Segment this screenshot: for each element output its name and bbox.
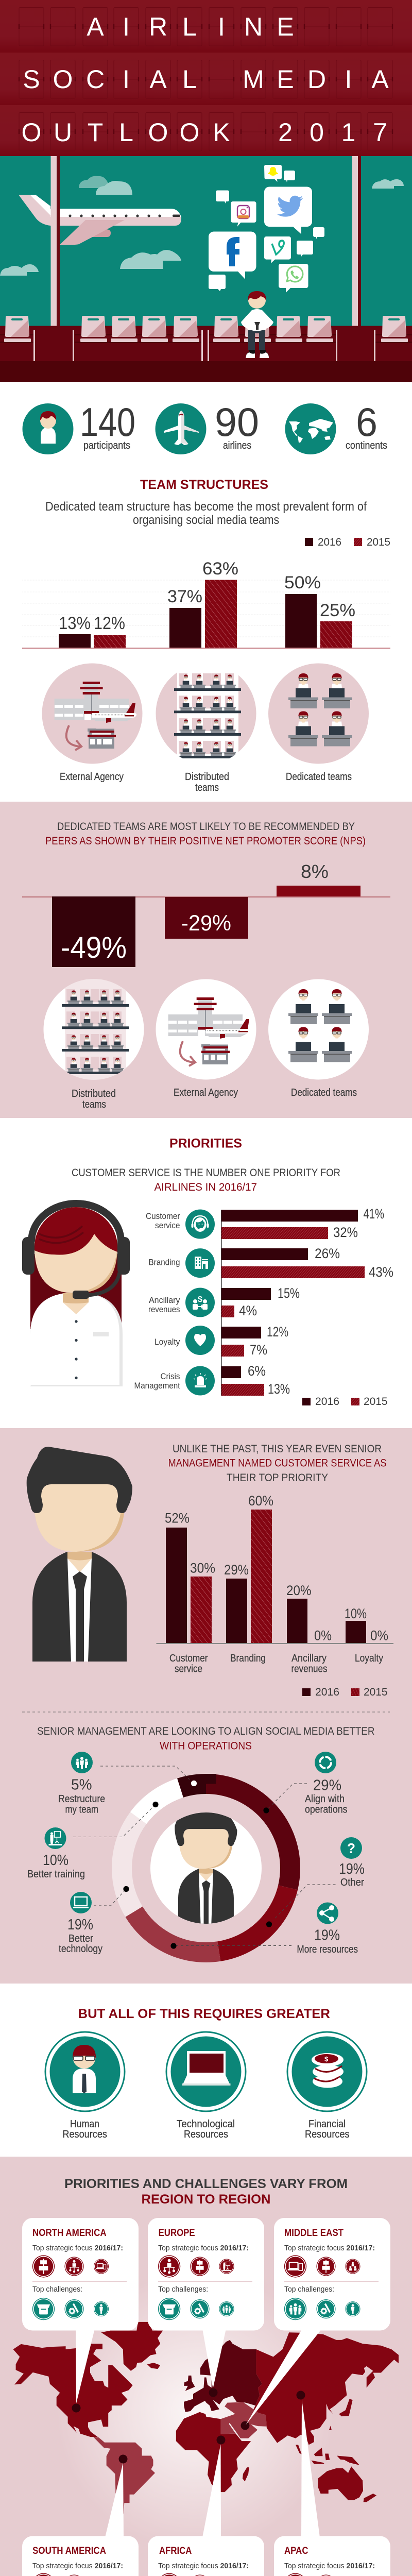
icon: dedicated teams NPS	[268, 979, 369, 1098]
airport scene	[0, 156, 412, 382]
callout: align with operations: operations	[305, 1804, 347, 1816]
callout: better training: 10%	[43, 1852, 68, 1869]
icon: plane top view	[164, 411, 199, 445]
card: South America: 2016/17:	[95, 2562, 123, 2570]
world map	[13, 2322, 399, 2514]
callout: restructure my team	[58, 1752, 105, 1816]
figure: manager in donut	[175, 1812, 237, 1924]
figure: senior manager	[27, 1447, 132, 1662]
card: Middle East	[274, 2218, 390, 2331]
icon: human resources: Human	[70, 2119, 99, 2130]
regions heading: PRIORITIES AND CHALLENGES VARY FROM	[64, 2177, 348, 2191]
branding row: Branding	[148, 1257, 180, 1267]
card: APAC: APAC	[284, 2546, 308, 2556]
bar chart: senior priorities: 30%	[190, 1560, 215, 1575]
bar chart: team structures	[22, 559, 390, 649]
senior management heading: MANAGEMENT NAMED CUSTOMER SERVICE AS	[168, 1457, 386, 1469]
ancillary revenues row: 4%	[239, 1303, 257, 1318]
icon: financial resources: $	[324, 2055, 329, 2063]
card: Africa	[148, 2536, 264, 2576]
card: Middle East: MIDDLE EAST	[284, 2228, 344, 2239]
align with operations heading	[37, 1725, 375, 1752]
icon: technological resources	[166, 2032, 246, 2140]
icon: human resources: Resources	[62, 2129, 107, 2140]
card: APAC: 2016/17:	[346, 2562, 375, 2570]
bar chart: senior priorities: 29%	[224, 1562, 249, 1578]
seats	[4, 316, 408, 342]
icon: distributed teams: teams	[195, 782, 219, 793]
bar chart: senior priorities: 20%	[286, 1583, 311, 1598]
bar chart: senior priorities: Ancillary	[291, 1653, 327, 1664]
NPS heading	[45, 821, 366, 847]
icon: distributed teams: Distributed	[185, 771, 229, 783]
callout: other: Other	[340, 1877, 364, 1888]
customer service row: 41%	[364, 1206, 384, 1222]
crisis management row: 13%	[268, 1381, 290, 1397]
icon: distributed teams NPS: teams	[82, 1099, 106, 1110]
heading: requires greater: BUT ALL OF THIS REQUIRES GREATER	[78, 2007, 330, 2021]
icon: financial resources	[287, 2032, 367, 2140]
heading: priorities: PRIORITIES	[169, 1137, 242, 1151]
card pointers	[76, 2329, 322, 2537]
icon: external agency NPS: External Agency	[174, 1087, 238, 1098]
departure board title: SOCIAL MEDIA	[23, 65, 389, 94]
team structures subtitle	[45, 500, 367, 527]
NPS bar chart: -29%	[181, 911, 231, 936]
icon: technological resources: Technological	[177, 2119, 235, 2130]
stat: participants: participants	[83, 440, 130, 451]
card: South America: Top strategic focus	[32, 2562, 93, 2570]
bar chart: priorities	[134, 1206, 393, 1397]
icon: dedicated teams	[268, 664, 369, 783]
map pins	[72, 2388, 305, 2464]
legend: senior chart: 2015	[364, 1686, 387, 1698]
callout: more resources: More resources	[297, 1944, 358, 1955]
legend: senior chart	[302, 1686, 387, 1698]
NPS bar chart: 8%	[301, 861, 329, 882]
legend: priorities: 2015	[364, 1396, 387, 1408]
stat: airlines	[156, 399, 259, 454]
ancillary revenues row: Ancillary	[149, 1295, 180, 1305]
card: Middle East: Top strategic focus	[284, 2244, 345, 2252]
legend: team chart: 2016	[318, 536, 341, 548]
departure board title: OUTLOOK 2017	[22, 118, 387, 147]
callout: other	[339, 1837, 365, 1888]
icon: technological resources: Resources	[184, 2129, 228, 2140]
clouds	[0, 176, 404, 276]
icon: dedicated teams: Dedicated teams	[286, 771, 352, 783]
crisis management row: Crisis	[161, 1371, 180, 1381]
icon: person	[40, 411, 56, 444]
regions heading: REGION TO REGION	[141, 2192, 271, 2207]
senior management heading: UNLIKE THE PAST, THIS YEAR EVEN SENIOR	[173, 1443, 382, 1455]
figure: customer service agent	[22, 1204, 130, 1386]
customer service row: 32%	[333, 1225, 358, 1240]
callout: better technology: 19%	[67, 1917, 93, 1933]
card: Middle East: Top challenges:	[284, 2285, 334, 2294]
callout: more resources	[297, 1902, 358, 1955]
senior management heading: THEIR TOP PRIORITY	[227, 1472, 328, 1484]
bar chart: senior priorities: Loyalty	[355, 1653, 383, 1664]
bar chart: senior priorities: 52%	[165, 1511, 190, 1526]
bar chart: team structures: 13%	[59, 614, 91, 633]
icon: distributed teams	[156, 663, 256, 793]
bar chart: senior priorities: 0%	[314, 1628, 332, 1643]
callout: more resources: 19%	[314, 1927, 340, 1943]
bar chart: senior priorities: Branding	[230, 1653, 266, 1664]
stat: participants: 140	[80, 399, 135, 445]
callout: restructure my team: 5%	[71, 1776, 92, 1793]
callout: better training	[27, 1827, 85, 1880]
align with operations heading: WITH OPERATIONS	[160, 1740, 252, 1752]
bar chart: senior priorities: 0%	[370, 1628, 388, 1643]
card: North America: NORTH AMERICA	[32, 2228, 107, 2239]
card: Europe	[148, 2218, 264, 2331]
donut chart	[122, 1784, 290, 1953]
crisis management row: Management	[134, 1381, 180, 1391]
panel: senior management	[0, 1428, 412, 1984]
panel: regions	[0, 2157, 412, 2576]
priorities subtitle: CUSTOMER SERVICE IS THE NUMBER ONE PRIORITY FOR	[72, 1167, 340, 1179]
card: North America: 2016/17:	[95, 2244, 123, 2252]
card: North America	[22, 2218, 139, 2331]
bar chart: senior priorities: service	[175, 1663, 202, 1674]
card: Europe: Top challenges:	[158, 2285, 208, 2294]
legend: team chart	[305, 536, 390, 548]
icon: external agency: External Agency	[60, 771, 124, 783]
team structures subtitle: organising social media teams	[133, 513, 279, 527]
card: Europe: 2016/17:	[220, 2244, 249, 2252]
bar chart: senior priorities: revenues	[291, 1663, 328, 1674]
NPS bar chart: -49%	[61, 931, 127, 964]
card: South America: SOUTH AMERICA	[32, 2546, 106, 2556]
icon: external agency	[42, 664, 142, 783]
crisis management row	[134, 1363, 290, 1397]
ancillary revenues row: revenues	[148, 1304, 180, 1314]
branding row: 26%	[315, 1246, 340, 1261]
legend: team chart: 2015	[367, 536, 390, 548]
bar chart: team structures: 25%	[320, 601, 355, 620]
ancillary revenues row: 15%	[278, 1285, 300, 1301]
callout: better technology	[59, 1892, 102, 1955]
person with phone	[241, 291, 273, 358]
ancillary revenues row	[148, 1285, 300, 1318]
stat: continents	[285, 399, 387, 454]
card: Africa: AFRICA	[159, 2546, 192, 2556]
branding row	[148, 1246, 393, 1280]
NPS heading: PEERS AS SHOWN BY THEIR POSITIVE NET PROMOTER SCORE (NPS)	[45, 835, 366, 847]
card: North America: Top challenges:	[32, 2285, 82, 2294]
callout: align with operations	[305, 1752, 347, 1816]
loyalty row: Loyalty	[154, 1337, 180, 1347]
bar chart: senior priorities: Customer	[169, 1653, 208, 1664]
departure board title: AIRLINE	[87, 12, 294, 41]
priorities subtitle	[72, 1167, 340, 1193]
card: South America	[22, 2536, 139, 2576]
bar chart: team structures: 63%	[202, 559, 238, 579]
seating area floor	[0, 326, 412, 382]
bar chart: senior priorities: 60%	[248, 1493, 273, 1509]
card: Africa: Top strategic focus	[158, 2562, 218, 2570]
callout: other: ?	[347, 1840, 355, 1856]
customer service row: service	[155, 1221, 180, 1230]
bar chart: team structures: 37%	[167, 587, 202, 606]
callout: better training: Better training	[27, 1869, 85, 1880]
bar chart: team structures: 12%	[94, 614, 125, 633]
team structures subtitle: Dedicated team structure has become the most prevalent form of	[45, 500, 367, 514]
stat: continents: continents	[346, 440, 387, 451]
pillars	[50, 156, 361, 326]
callout: better technology: Better	[68, 1933, 93, 1944]
crisis management row: 6%	[248, 1363, 266, 1379]
stat: airlines: airlines	[223, 440, 251, 451]
stat: participants	[23, 399, 135, 454]
bar chart: senior priorities: 10%	[345, 1606, 367, 1621]
loyalty row	[154, 1324, 288, 1358]
bar chart: senior priorities	[157, 1493, 393, 1674]
social media bubbles	[209, 165, 324, 293]
icon: financial resources: Financial	[308, 2119, 346, 2130]
callout: align with operations: 29%	[313, 1777, 341, 1794]
card: North America: Top strategic focus	[32, 2244, 93, 2252]
card: Middle East: 2016/17:	[346, 2244, 375, 2252]
loyalty row: 7%	[250, 1342, 267, 1358]
callout: other: 19%	[339, 1861, 365, 1877]
icon: financial resources: Resources	[305, 2129, 350, 2140]
departure board title	[0, 0, 412, 156]
stat: continents: 6	[356, 399, 377, 445]
card: Europe: EUROPE	[159, 2228, 195, 2239]
callout: better technology: technology	[59, 1943, 102, 1955]
customer service row	[146, 1206, 384, 1240]
NPS bar chart	[22, 861, 390, 967]
priorities subtitle: AIRLINES IN 2016/17	[154, 1181, 257, 1193]
senior management heading	[168, 1443, 386, 1484]
plane	[19, 195, 181, 245]
align with operations heading: SENIOR MANAGEMENT ARE LOOKING TO ALIGN SOCIAL MEDIA BETTER	[37, 1725, 375, 1737]
regions heading	[64, 2177, 348, 2207]
icon: distributed teams NPS	[43, 979, 144, 1110]
card: APAC	[274, 2536, 390, 2576]
panel: NPS	[0, 802, 412, 1118]
icon: human resources	[45, 2032, 125, 2140]
icon: distributed teams NPS: Distributed	[72, 1088, 116, 1099]
icon: dedicated teams NPS: Dedicated teams	[291, 1087, 357, 1098]
callout: align with operations: Align with	[305, 1793, 345, 1805]
legend: senior chart: 2016	[315, 1686, 339, 1698]
icon: external agency NPS	[156, 979, 256, 1098]
legend: priorities: 2016	[315, 1396, 339, 1408]
NPS heading: DEDICATED TEAMS ARE MOST LIKELY TO BE RECOMMENDED BY	[57, 821, 355, 833]
card: Africa: 2016/17:	[220, 2562, 249, 2570]
ancillary revenues row: $	[198, 1295, 202, 1304]
leader lines and dots	[73, 1766, 336, 1949]
callout: restructure my team: my team	[65, 1804, 98, 1816]
legend: priorities	[302, 1396, 387, 1408]
heading: team structures: TEAM STRUCTURES	[140, 478, 268, 492]
stat: airlines: 90	[215, 399, 259, 445]
callout: restructure my team: Restructure	[58, 1793, 105, 1805]
branding row: 43%	[369, 1264, 393, 1280]
bar chart: team structures: 50%	[284, 573, 321, 592]
customer service row: Customer	[146, 1211, 180, 1221]
loyalty row: 12%	[267, 1324, 288, 1340]
card: Europe: Top strategic focus	[158, 2244, 218, 2252]
card: APAC: Top strategic focus	[284, 2562, 345, 2570]
icon: world map	[289, 419, 333, 443]
